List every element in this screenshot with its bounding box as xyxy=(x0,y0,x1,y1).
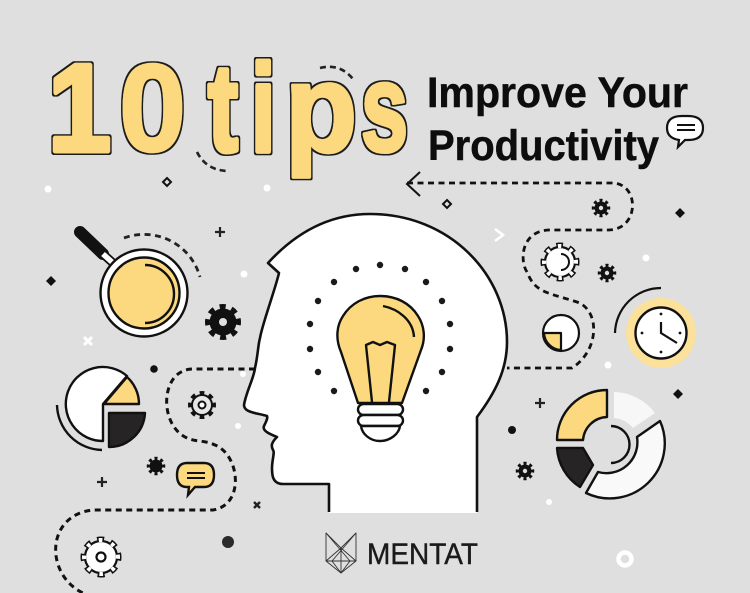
icon: large outlined gear bottom left xyxy=(84,540,118,574)
small black gears xyxy=(148,200,614,478)
dashed arrow path: top right xyxy=(407,172,633,368)
title: 10 tips: t xyxy=(208,40,238,178)
decorative black marks xyxy=(46,178,685,548)
icon: donut chart xyxy=(557,390,665,498)
subtitle: Improve Your Productivity: Productivity xyxy=(428,122,659,170)
title: 10 tips: p xyxy=(285,40,357,178)
icon: outlined gear top right xyxy=(544,246,576,278)
title: 10 tips: s xyxy=(361,40,408,178)
icon: yellow speech bubble xyxy=(177,463,214,495)
dashed path: left winding xyxy=(56,369,255,593)
subtitle: Improve Your Productivity xyxy=(427,69,688,170)
icon: light bulb xyxy=(337,296,424,441)
icon: clock xyxy=(615,288,696,368)
title: 10 tips xyxy=(48,40,408,178)
icon: small outlined gear xyxy=(190,394,214,416)
icon: white speech bubble xyxy=(667,116,703,147)
icon: small pie right xyxy=(543,315,579,351)
icon: large black gear xyxy=(208,306,238,338)
subtitle: Improve Your Productivity: Improve Your xyxy=(427,69,688,117)
title: 10 tips: i xyxy=(251,40,276,178)
title: 10 tips: 0 xyxy=(119,40,186,178)
logo fox icon xyxy=(326,533,356,573)
logo: MENTAT xyxy=(326,533,478,573)
decorative white marks xyxy=(44,184,650,566)
icon: pie chart left xyxy=(57,367,145,450)
logo: MENTAT: MENTAT xyxy=(367,538,478,571)
dots ring around bulb xyxy=(307,262,453,394)
icon: magnifying glass xyxy=(80,232,200,336)
head silhouette xyxy=(244,214,507,513)
dashed arcs near title xyxy=(197,67,353,171)
title: 10 tips: 1 xyxy=(48,40,111,178)
head outline xyxy=(244,214,507,512)
